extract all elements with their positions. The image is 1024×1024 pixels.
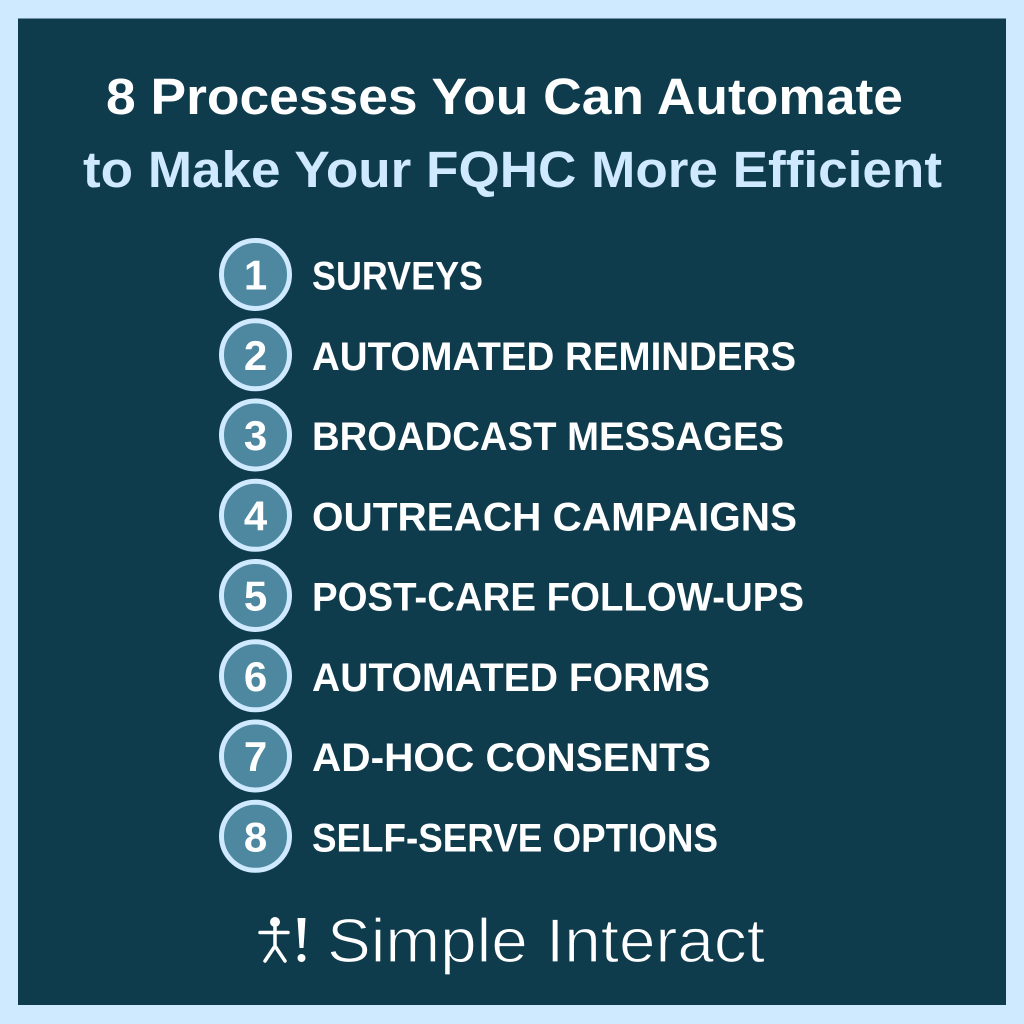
title: to Make Your FQHC More Efficient	[83, 141, 942, 198]
wordmark: Simple Interact	[327, 907, 765, 976]
item 2: automated reminders: 2	[244, 332, 267, 379]
item 2: automated reminders: AUTOMATED REMINDERS	[312, 335, 796, 379]
item 3: broadcast messages	[222, 401, 784, 469]
item 7: ad-hoc consents: 7	[244, 733, 267, 780]
item 6: automated forms: AUTOMATED FORMS	[312, 656, 710, 700]
item 5: post-care follow-ups	[222, 562, 804, 630]
numbered list	[222, 240, 804, 870]
item 6: automated forms	[222, 642, 710, 710]
title: 8 Processes You Can Automate	[106, 68, 903, 125]
title	[83, 68, 942, 198]
item 4: outreach campaigns	[222, 481, 797, 549]
item 2: automated reminders	[222, 321, 796, 389]
item 4: outreach campaigns: 4	[244, 492, 268, 539]
item 4: outreach campaigns: OUTREACH CAMPAIGNS	[312, 495, 797, 539]
item 8: self-serve options: 8	[244, 813, 267, 860]
item 6: automated forms: 6	[244, 653, 267, 700]
item 5: post-care follow-ups: POST-CARE FOLLOW-UPS	[312, 576, 804, 620]
logo: Simple Interact	[260, 907, 765, 976]
item 7: ad-hoc consents: AD-HOC CONSENTS	[312, 736, 711, 780]
item 3: broadcast messages: 3	[244, 412, 267, 459]
item 1: surveys	[222, 240, 483, 308]
item 8: self-serve options: SELF-SERVE OPTIONS	[312, 816, 718, 860]
item 8: self-serve options	[222, 802, 718, 870]
item 3: broadcast messages: BROADCAST MESSAGES	[312, 415, 784, 459]
item 7: ad-hoc consents	[222, 722, 711, 790]
item 1: surveys: 1	[244, 252, 267, 298]
item 1: surveys: SURVEYS	[312, 254, 483, 298]
item 5: post-care follow-ups: 5	[244, 572, 267, 620]
icon: person with exclamation mark	[260, 917, 306, 962]
